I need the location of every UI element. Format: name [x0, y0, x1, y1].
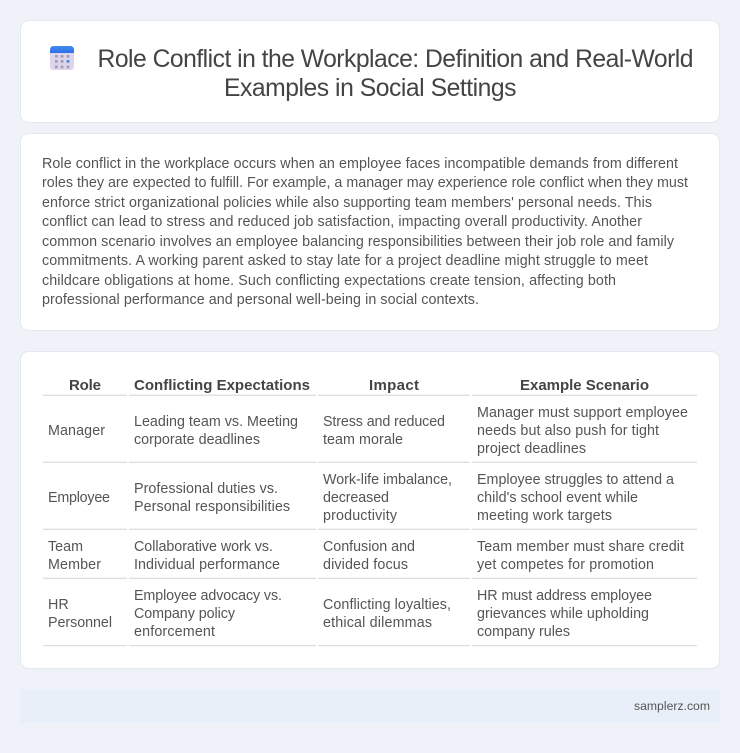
- title: Examples in Social Settings: [224, 75, 516, 102]
- table row: HR Personnel: Conflicting loyalties,: [323, 597, 451, 613]
- table row: Team Member: divided focus: [323, 557, 408, 573]
- table header: Role: [69, 377, 101, 394]
- table row: Employee: decreased: [323, 490, 389, 506]
- table row: Manager: Leading team vs. Meeting: [134, 414, 298, 430]
- table row: HR Personnel: Personnel: [48, 615, 112, 631]
- table header: Impact: [369, 377, 419, 394]
- text block: description paragraph: Role conflict in the workplace occurs when an employee faces incompatible demands from different: [42, 156, 678, 172]
- table row: Manager: Manager must support employee: [477, 405, 688, 421]
- table row: Employee: Professional duties vs.: [134, 481, 278, 497]
- table row: HR Personnel: Employee advocacy vs.: [134, 588, 282, 604]
- table header: Conflicting Expectations: [134, 377, 310, 394]
- table row: Employee: child's school event while: [477, 490, 638, 506]
- table row: Employee: meeting work targets: [477, 508, 612, 524]
- table row: HR Personnel: grievances while upholding: [477, 606, 649, 622]
- text block: description paragraph: roles they are expected to fulfill. For example, a manager may experience role conflict when they must: [42, 175, 688, 191]
- footer bar: [20, 689, 720, 723]
- panel: role conflict table: [20, 352, 720, 668]
- table row: Manager: Manager: [48, 423, 105, 439]
- table row: Employee: [43, 472, 697, 529]
- text block: description paragraph: commitments. A working parent asked to stay late for a project deadline might struggle to meet: [42, 253, 648, 269]
- table row: Employee: Employee struggles to attend a: [477, 472, 674, 488]
- panel: description: [20, 134, 720, 330]
- table row: Manager: project deadlines: [477, 441, 586, 457]
- table row: Employee: Personal responsibilities: [134, 499, 290, 515]
- text block: description paragraph: childcare obligations at home. Such conflicting expectations create tension, affecting both: [42, 273, 616, 289]
- table row: Manager: [43, 405, 697, 462]
- title: Role Conflict in the Workplace: Definition and Real-World: [98, 46, 694, 73]
- table row: Team Member: Team member must share credit: [477, 539, 684, 555]
- table row: HR Personnel: company rules: [477, 624, 570, 640]
- panel: title header: [20, 20, 720, 122]
- table row: HR Personnel: HR: [48, 597, 69, 613]
- table row: Team Member: Team: [48, 539, 83, 555]
- table row: HR Personnel: HR must address employee: [477, 588, 652, 604]
- title: [98, 46, 694, 102]
- table row: HR Personnel: enforcement: [134, 624, 215, 640]
- table row: Manager: Stress and reduced: [323, 414, 445, 430]
- table row: Manager: corporate deadlines: [134, 432, 260, 448]
- table header: [43, 377, 697, 395]
- table row: Employee: productivity: [323, 508, 398, 524]
- text block: description paragraph: professional performance and personal well-being in social contexts.: [42, 292, 479, 308]
- text block: description paragraph: conflict can lead to stress and reduced job satisfaction, impacting overall productivity. Another: [42, 214, 642, 230]
- table header: Example Scenario: [520, 377, 649, 394]
- table row: Employee: Work-life imbalance,: [323, 472, 452, 488]
- table row: HR Personnel: [43, 588, 697, 646]
- table row: HR Personnel: Company policy: [134, 606, 236, 622]
- text block: description paragraph: common scenario involves an employee balancing responsibilities between their job role and family: [42, 234, 675, 250]
- table row: Employee: Employee: [48, 490, 110, 506]
- footer site name: samplerz.com: [634, 699, 710, 713]
- text block: description paragraph: [42, 156, 688, 308]
- table row: Team Member: Member: [48, 557, 101, 573]
- table row: Team Member: Individual performance: [134, 557, 280, 573]
- text block: description paragraph: enforce strict organizational policies while also supporting team members' personal needs. This: [42, 195, 652, 211]
- table row: Team Member: Collaborative work vs.: [134, 539, 273, 555]
- table row: Manager: needs but also push for tight: [477, 423, 659, 439]
- table row: HR Personnel: ethical dilemmas: [323, 615, 432, 631]
- table row: Manager: team morale: [323, 432, 403, 448]
- table row: Team Member: [43, 539, 697, 578]
- icon: calendar: [50, 46, 74, 70]
- table row: Team Member: Confusion and: [323, 539, 415, 555]
- table row: Team Member: yet competes for promotion: [477, 557, 654, 573]
